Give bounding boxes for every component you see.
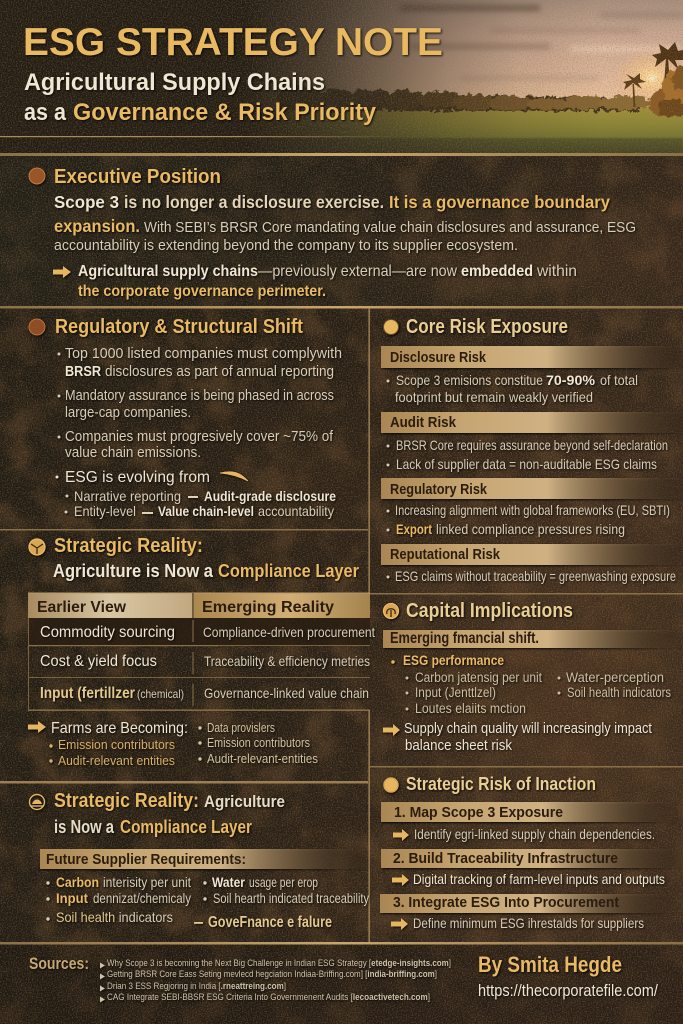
implication text (404, 721, 652, 754)
performance list (391, 653, 671, 716)
icon: globe badge (29, 539, 45, 555)
author url: https://thecorporatefile.com/ (478, 981, 658, 1000)
heading: Core Risk Exposure (406, 316, 568, 338)
comparison table (28, 592, 375, 711)
row 3 (40, 685, 369, 702)
bullet list: disclosures as part of annual reporting (105, 363, 334, 380)
heading: Strategic Reality: (54, 535, 203, 557)
panel: executive position (29, 166, 636, 300)
footer: author (478, 952, 658, 1000)
callout heading: Farms are Becoming: (51, 720, 188, 737)
key takeaway: Agricultural supply chains (78, 263, 258, 280)
bullet list (56, 345, 342, 519)
lead statement: is no longer a disclosure exercise. (124, 192, 384, 212)
source list: Getting BRSR Core Eass Seting mevlecd hegciation Indiaa-Briffing.com] [india-briffing.com] (107, 969, 437, 980)
subheading (53, 561, 359, 581)
icon: badge (384, 604, 398, 618)
row 1: Compliance-driven procurement (203, 624, 375, 640)
source list: Why Scope 3 is becoming the Next Big Challenge in Indian ESG Strategy [etedge-insights.com] (107, 958, 451, 969)
row 2: Traceability & efficiency metries (204, 653, 370, 669)
row 1 (40, 624, 375, 641)
icon: bullet (384, 320, 398, 334)
key takeaway: embedded (461, 263, 533, 280)
right list (198, 721, 318, 766)
regulatory risk: linked compliance pressures rising (436, 521, 625, 537)
left list: Emission contributors (58, 737, 175, 752)
key takeaway: —previously external—are now (258, 263, 457, 280)
regulatory risk: Export (396, 521, 432, 537)
farms are becoming callout (28, 720, 318, 768)
bullet list: Entity-level (74, 503, 136, 519)
comparison table: Earlier View (37, 599, 127, 616)
panel: strategic reality, future supplier requirements (30, 790, 369, 931)
icon: swoosh arrow (220, 472, 248, 481)
subtitle line 1: Agricultural Supply Chains (24, 69, 325, 96)
right list: Emission contributors (207, 736, 310, 750)
arrow (383, 724, 400, 736)
requirement list: Carbon (56, 874, 99, 890)
title block (23, 21, 443, 126)
panel: strategic risk of inaction (380, 774, 683, 931)
requirement list: dennizat/chemicaly (93, 890, 191, 906)
key takeaway: within (536, 263, 577, 280)
left list (49, 737, 175, 768)
heading: Executive Position (54, 166, 221, 188)
lead statement: Scope 3 (54, 192, 119, 212)
heading: Agriculture (204, 792, 285, 811)
disclosure risk: 70-90% (546, 372, 596, 388)
row 2: Cost & yield focus (40, 653, 157, 670)
row 2 (40, 653, 370, 670)
right list: Data provislers (207, 721, 275, 735)
author name: By Smita Hegde (478, 952, 622, 977)
bullet list: Mandatory assurance is being phased in across (65, 387, 334, 404)
footer: sources (29, 954, 451, 1003)
source list: CAG Integrate SEBI-BBSR ESG Criteria Into Governmenent Audits [lecoactivetech.com] (107, 992, 430, 1003)
bullet list: ESG is evolving from (65, 469, 210, 486)
lead statement: expansion. (54, 216, 140, 236)
lead statement (54, 192, 610, 236)
disclosure risk (381, 346, 683, 405)
body text: With SEBI’s BRSR Core mandating value chain disclosures and assurance, ESG (144, 219, 636, 236)
subtitle line 2: as a (24, 99, 67, 126)
heading: Compliance Layer (120, 817, 252, 837)
subheading: Agriculture is Now a (53, 561, 214, 581)
disclosure risk: Disclosure Risk (390, 350, 487, 366)
requirement list: usage per erop (249, 874, 318, 890)
implication text: balance sheet risk (405, 738, 513, 754)
bullet list: Top 1000 listed companies must complywith (65, 345, 342, 362)
source list: Drian 3 ESS Regjoring in India [.rneattreing.com] (107, 981, 286, 992)
bullet list: Narrative reporting (74, 488, 181, 504)
sources label: Sources: (29, 954, 89, 973)
tree line (278, 85, 651, 111)
table header: emerging reality (193, 593, 370, 618)
right list: Audit-relevant-entities (207, 752, 318, 766)
section dividers (0, 136, 683, 944)
audit risk (381, 412, 683, 472)
regulatory risk: Regulatory Risk (390, 482, 488, 498)
performance list: ESG performance (403, 653, 504, 668)
step 2: 2. Build Traceability Infrastructure (393, 850, 618, 867)
requirement list (46, 874, 369, 925)
title: ESG STRATEGY NOTE (23, 21, 443, 64)
source list (100, 958, 451, 1003)
bullet list: Value chain-level (158, 503, 254, 519)
subtitle line 2: Governance & Risk Priority (73, 99, 377, 126)
arrow (28, 721, 46, 733)
heading: Strategic Reality: (54, 790, 199, 812)
performance list: Loutes elaiits mction (415, 701, 526, 716)
banner: future supplier requirements (40, 849, 368, 869)
icon: bullet (384, 778, 398, 792)
reputational risk: Reputational Risk (390, 547, 501, 563)
requirement list: Soil hearth indicated traceability (213, 890, 369, 906)
bullet list: Audit-grade disclosure (204, 488, 336, 504)
panel: core risk exposure (381, 316, 683, 584)
implication text: Supply chain quality will increasingly impact (404, 721, 652, 737)
reputational risk (381, 544, 683, 584)
disclosure risk: Scope 3 emisions constitue (396, 372, 543, 388)
panel: capital implications (383, 600, 683, 754)
audit risk: Audit Risk (390, 415, 457, 431)
step 3: 3. Integrate ESG Into Procurement (393, 894, 619, 911)
icon: bullet (29, 319, 45, 335)
bullet list: value chain emissions. (65, 444, 201, 461)
arrow (53, 266, 71, 278)
panel: regulatory and structural shift (29, 316, 342, 519)
requirement list: Input (56, 890, 88, 906)
subheading: Compliance Layer (218, 561, 359, 581)
heading: Strategic Risk of Inaction (406, 774, 596, 794)
step 2 (381, 849, 683, 887)
heading: Capital Implications (406, 600, 573, 622)
panel: executive position: accountability is extending beyond the company to its supplier ecosystem. (54, 237, 518, 254)
icon: badge (30, 794, 44, 810)
requirement list: Water (212, 874, 245, 890)
regulatory risk (381, 478, 683, 537)
key takeaway (78, 263, 577, 300)
left list: Audit-relevant entities (58, 753, 175, 768)
heading: is Now a (54, 817, 115, 837)
bullet list: BRSR (65, 363, 101, 380)
palm trees (623, 42, 683, 107)
row 1: Commodity sourcing (40, 624, 175, 641)
row 3: (chemical) (137, 687, 184, 701)
governance failure note: GoveFnance e falure (208, 914, 332, 931)
panel: strategic reality table (29, 535, 359, 581)
heading (54, 790, 285, 837)
step 3 (380, 894, 672, 931)
hero: sunset field scene (0, 0, 683, 155)
requirement list: Soil health indicators (56, 909, 173, 925)
lead statement: It is a governance boundary (389, 192, 610, 212)
step 1: 1. Map Scope 3 Exposure (394, 804, 563, 821)
bullet list: Companies must progresively cover ~75% of (65, 428, 334, 445)
banner: emerging financial shift (383, 630, 683, 648)
banner: emerging financial shift: Emerging fmancial shift. (390, 630, 539, 647)
bullet list: large-cap companies. (65, 404, 191, 421)
heading: Regulatory & Structural Shift (55, 316, 303, 338)
bullet list: accountability (258, 503, 334, 519)
disclosure risk: of total (600, 372, 638, 388)
banner: future supplier requirements: Future Supplier Requirements: (46, 851, 246, 868)
step 1 (381, 802, 676, 842)
requirement list: interisity per unit (103, 874, 191, 890)
icon: bullet (29, 168, 45, 184)
row 3: Input (fertillzer (40, 685, 135, 702)
table header: earlier view (28, 593, 192, 618)
performance list: Input (Jenttlzel) (415, 685, 496, 700)
comparison table: Emerging Reality (202, 599, 334, 616)
performance list: Water-perception (566, 670, 664, 685)
big tree (649, 66, 683, 117)
key takeaway: the corporate governance perimeter. (78, 283, 326, 300)
disclosure risk: footprint but remain weakly verified (395, 389, 593, 405)
row 3: Governance-linked value chain (204, 685, 369, 701)
performance list: Carbon jatensig per unit (415, 670, 542, 685)
